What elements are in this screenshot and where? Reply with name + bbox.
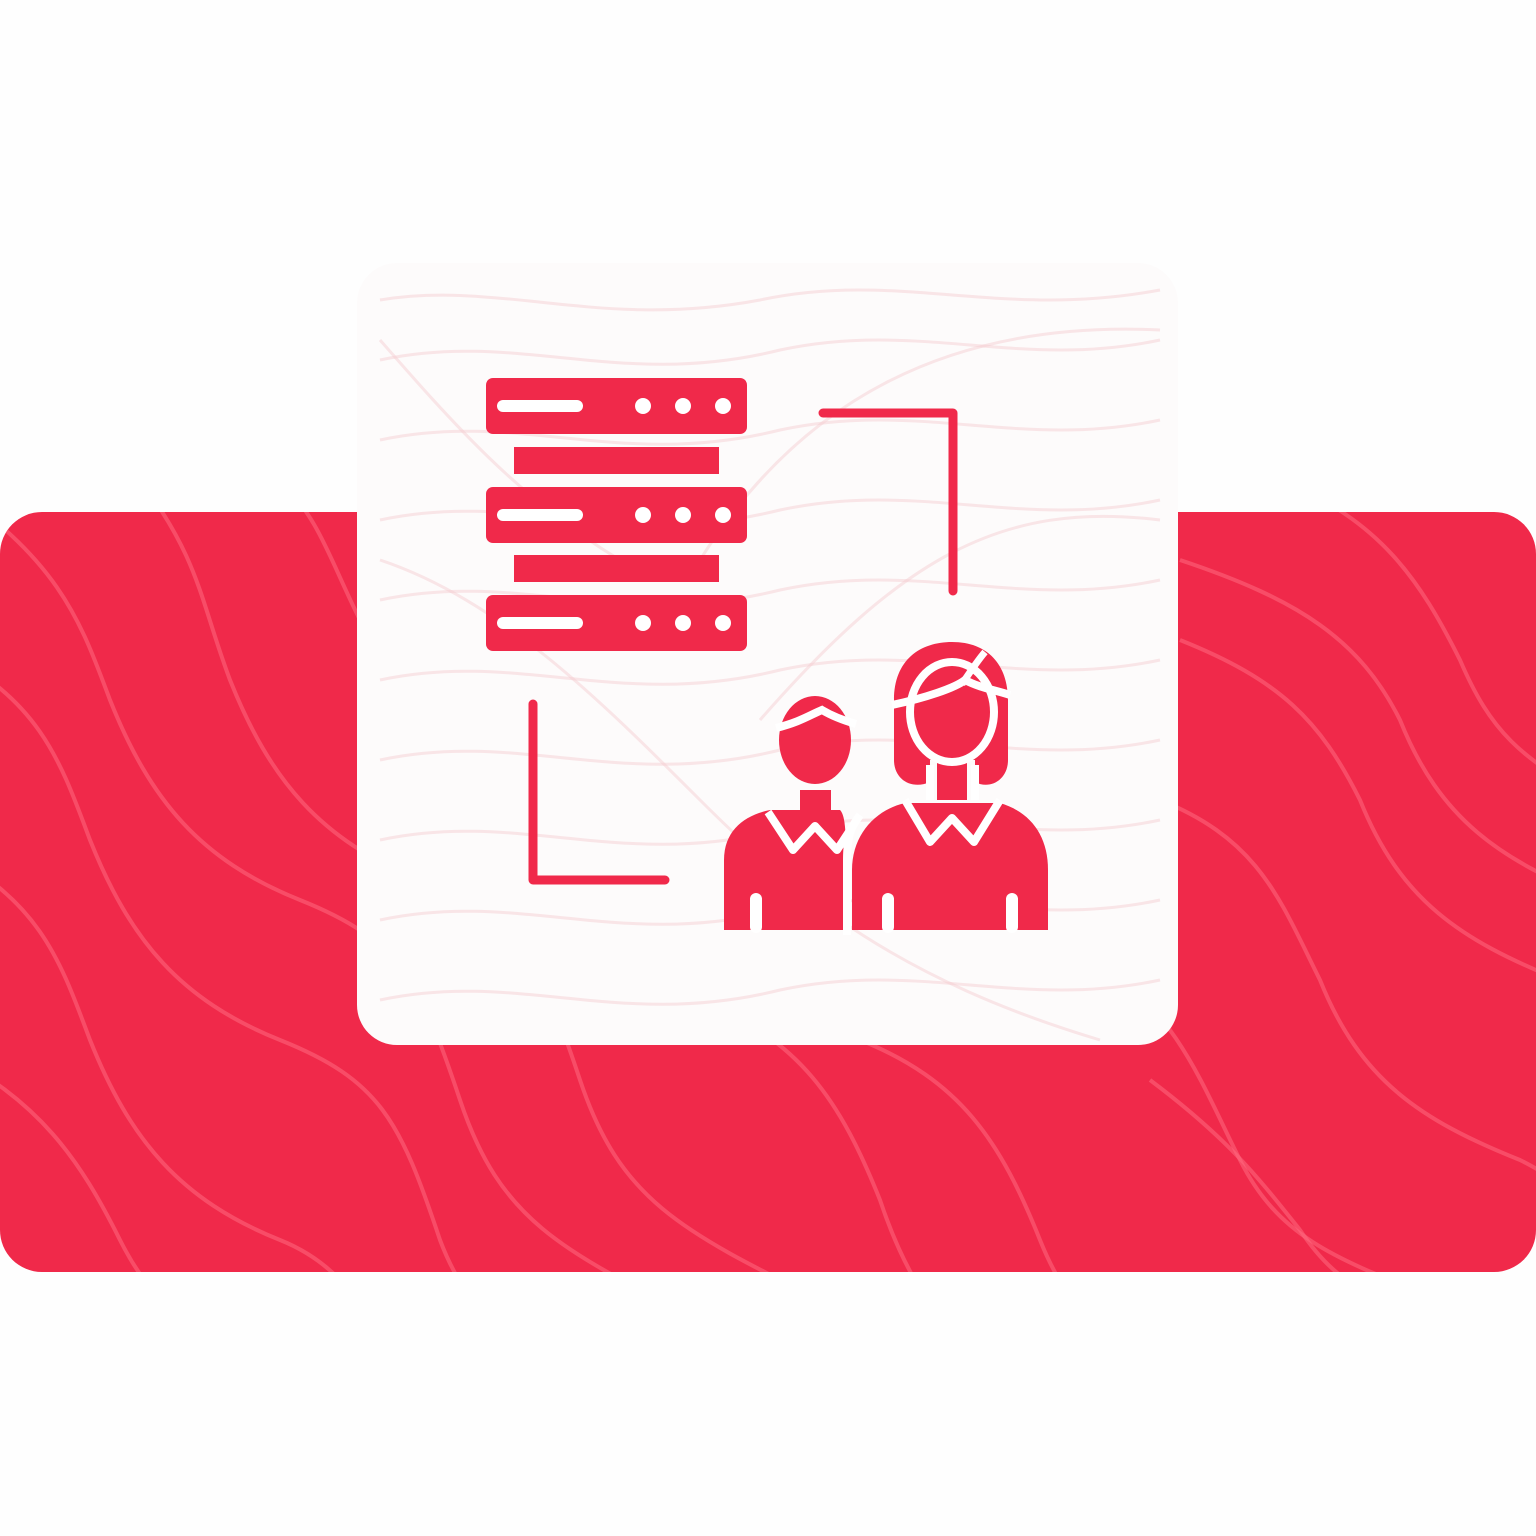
woman <box>852 642 1048 930</box>
icon: server rack <box>486 378 747 651</box>
arrow: top-right corner connector <box>823 413 953 591</box>
icon: two people <box>724 642 1048 935</box>
man <box>724 696 851 930</box>
panel: red background band <box>0 512 1536 1272</box>
panel: white card <box>357 263 1178 1045</box>
arrow: bottom-left corner connector <box>533 704 665 880</box>
